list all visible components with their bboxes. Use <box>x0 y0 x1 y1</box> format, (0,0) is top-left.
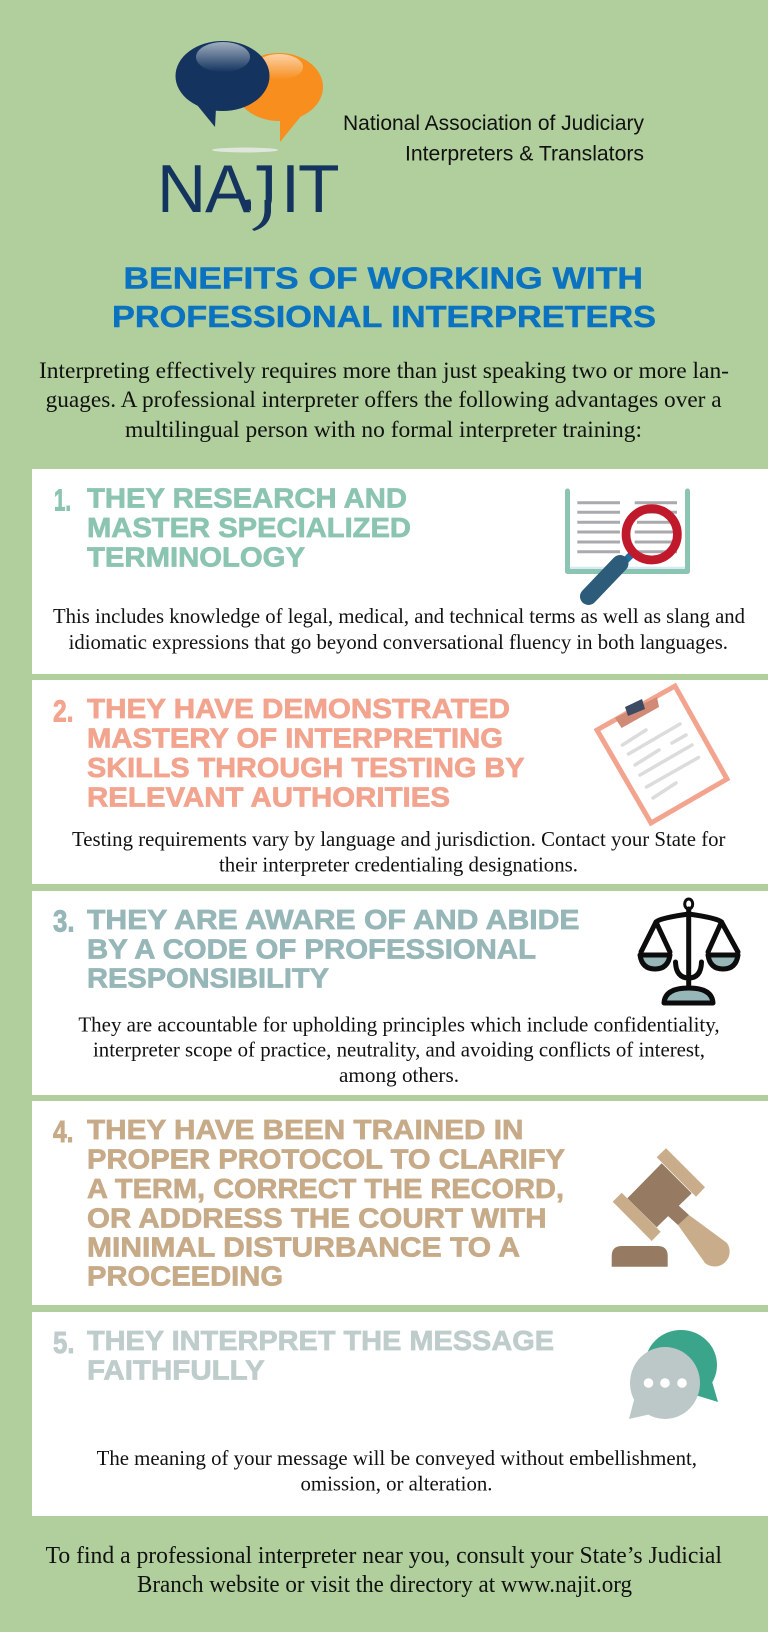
intro paragraph: guages. A professional interpreter offers the following advantages over a <box>46 387 722 412</box>
heading 2 <box>87 693 525 812</box>
number 3: 3. <box>53 904 74 938</box>
panel 4: protocol <box>32 1101 768 1305</box>
body text 1: idiomatic expressions that go beyond conversational fluency in both languages. <box>69 630 728 654</box>
icon: orange speech bubble <box>235 53 323 142</box>
body text 3: among others. <box>339 1063 459 1087</box>
heading 4: OR ADDRESS THE COURT WITH <box>87 1203 547 1234</box>
heading 3: RESPONSIBILITY <box>87 963 329 994</box>
body text 2: their interpreter credentialing designations. <box>219 852 578 876</box>
panel 5: faithful message <box>32 1312 768 1516</box>
heading 4: PROPER PROTOCOL TO CLARIFY <box>87 1144 565 1175</box>
heading 2: THEY HAVE DEMONSTRATED <box>87 693 510 724</box>
body text 2: Testing requirements vary by language and jurisdiction. Contact your State for <box>72 827 726 851</box>
heading 5 <box>87 1325 554 1385</box>
footer text: Branch website or visit the directory at www.najit.org <box>137 1572 632 1598</box>
footer text: To find a professional interpreter near you, consult your State’s Judicial <box>46 1543 722 1569</box>
panel 2: testing <box>32 680 768 884</box>
footer text <box>46 1543 722 1598</box>
heading 3: BY A CODE OF PROFESSIONAL <box>87 933 536 964</box>
number 1: 1. <box>54 482 71 518</box>
title: BENEFITS OF WORKING WITH <box>124 260 643 296</box>
body text 1: This includes knowledge of legal, medical, and technical terms as well as slang and <box>53 604 745 628</box>
heading 4: PROCEEDING <box>87 1261 283 1292</box>
heading 4: THEY HAVE BEEN TRAINED IN <box>87 1114 524 1145</box>
logo: NAJIT speech bubbles and wordmark <box>157 41 340 231</box>
body text 3: They are accountable for upholding principles which include confidentiality, <box>78 1012 720 1036</box>
icon: open book with magnifying glass <box>568 491 688 596</box>
heading 3 <box>87 904 580 994</box>
organization name: National Association of Judiciary <box>343 112 644 135</box>
heading 4: MINIMAL DISTURBANCE TO A <box>87 1232 520 1263</box>
number 2: 2. <box>53 694 74 728</box>
organization name: Interpreters & Translators <box>405 142 644 166</box>
panel 1: terminology <box>32 469 768 674</box>
icon: clipboard <box>597 686 727 823</box>
icon: navy speech bubble <box>176 41 270 127</box>
body text 5 <box>97 1446 697 1496</box>
heading 5: THEY INTERPRET THE MESSAGE <box>87 1325 554 1356</box>
body text 5: omission, or alteration. <box>300 1472 492 1496</box>
heading 3: THEY ARE AWARE OF AND ABIDE <box>87 904 580 935</box>
logo wordmark: NAJIT <box>157 151 340 227</box>
panel 3: code of responsibility <box>32 891 768 1095</box>
heading 4 <box>87 1114 565 1292</box>
body text 3 <box>78 1012 720 1087</box>
heading 5: FAITHFULLY <box>87 1354 265 1385</box>
organization name <box>343 112 644 166</box>
heading 1 <box>87 482 411 572</box>
number 4: 4. <box>53 1114 74 1149</box>
icon: gavel <box>612 1148 730 1267</box>
intro paragraph: Interpreting effectively requires more than just speaking two or more lan- <box>39 358 729 383</box>
heading 1: THEY RESEARCH AND <box>87 482 407 514</box>
body text 5: The meaning of your message will be conveyed without embellishment, <box>97 1446 697 1470</box>
heading 1: TERMINOLOGY <box>87 542 305 572</box>
heading 1: MASTER SPECIALIZED <box>87 512 411 543</box>
heading 2: SKILLS THROUGH TESTING BY <box>87 752 525 783</box>
title: PROFESSIONAL INTERPRETERS <box>112 299 656 334</box>
title <box>112 260 656 334</box>
intro paragraph: multilingual person with no formal interpreter training: <box>125 417 642 442</box>
logo highlight ellipse <box>212 148 278 152</box>
heading 4: A TERM, CORRECT THE RECORD, <box>87 1173 564 1204</box>
icon: scales of justice <box>640 899 738 1003</box>
heading 2: RELEVANT AUTHORITIES <box>87 782 450 812</box>
icon: chat bubbles <box>629 1330 718 1419</box>
heading 2: MASTERY OF INTERPRETING <box>87 722 503 754</box>
intro paragraph <box>39 358 729 442</box>
number 5: 5. <box>53 1325 74 1360</box>
body text 1 <box>53 604 745 654</box>
body text 2 <box>72 827 726 876</box>
body text 3: interpreter scope of practice, neutrality, and avoiding conflicts of interest, <box>93 1038 705 1062</box>
